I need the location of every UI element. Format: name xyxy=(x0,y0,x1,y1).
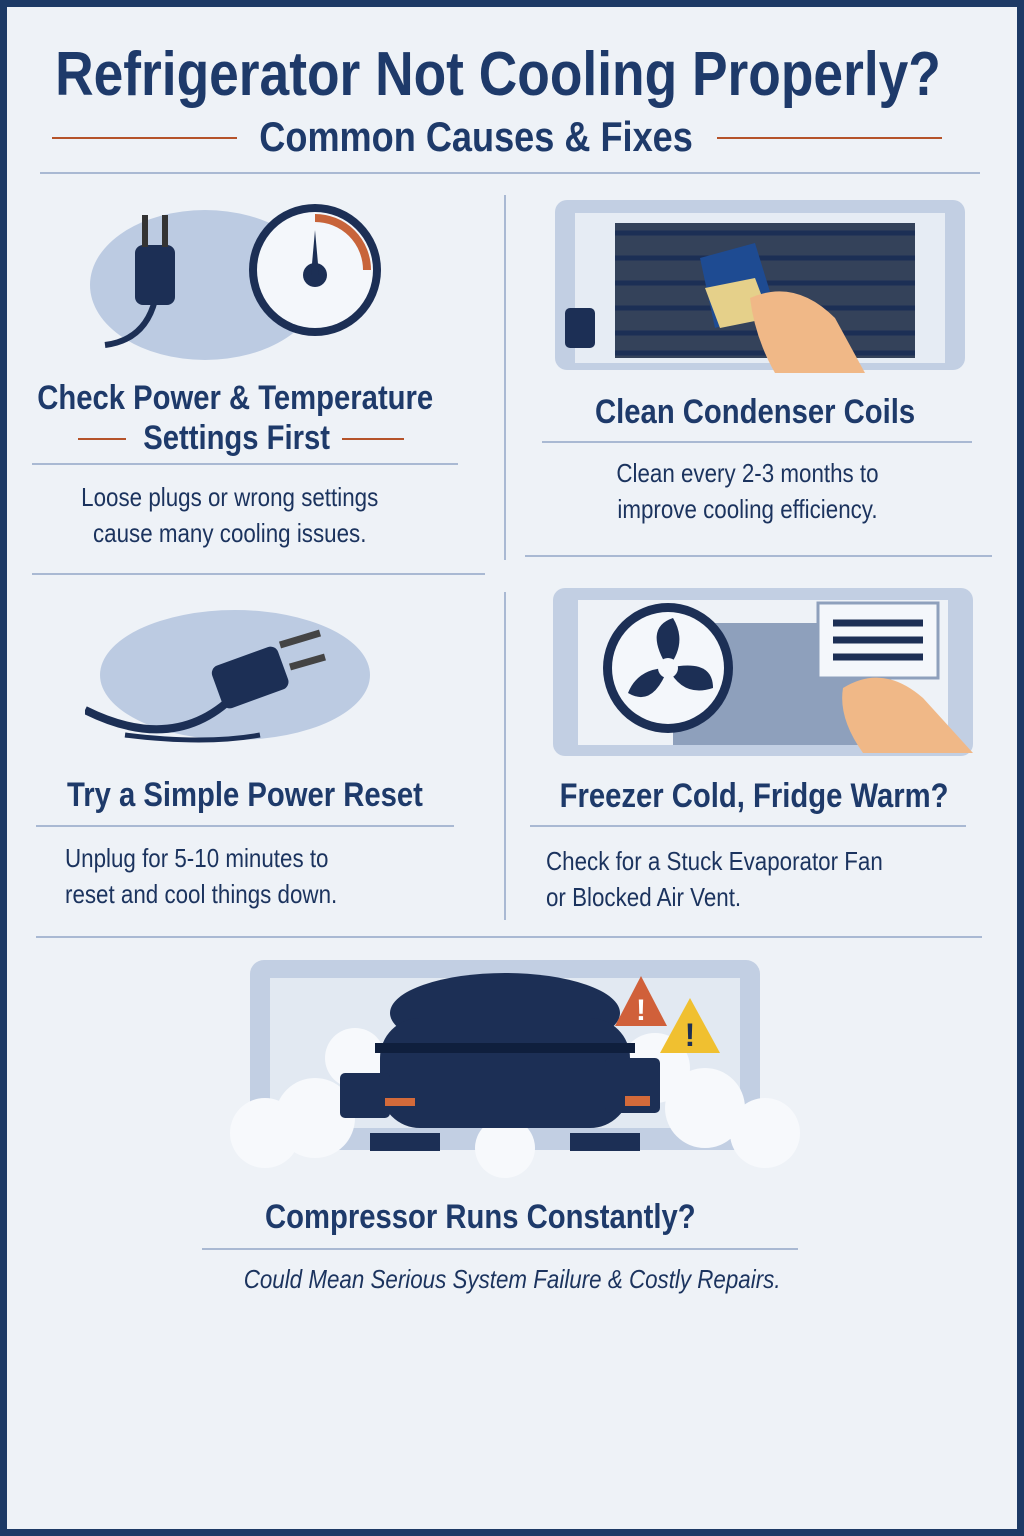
icon: compressor with warnings: ! xyxy=(685,1017,695,1053)
text: or Blocked Air Vent. xyxy=(546,882,741,912)
text: improve cooling efficiency. xyxy=(617,494,878,524)
text: Could Mean Serious System Failure & Costly Repairs. xyxy=(244,1264,781,1294)
text xyxy=(616,458,879,524)
text xyxy=(65,843,337,909)
panel: power & temperature xyxy=(32,204,458,548)
title: Refrigerator Not Cooling Properly? xyxy=(55,40,941,109)
subtitle: Common Causes & Fixes xyxy=(259,113,693,160)
icon: plug and thermostat xyxy=(90,204,381,360)
panel: power reset xyxy=(36,610,454,909)
text: Clean every 2-3 months to xyxy=(616,458,879,488)
heading: Settings First xyxy=(144,419,330,457)
text xyxy=(81,482,379,548)
panel: condenser coils xyxy=(542,200,972,524)
text: reset and cool things down. xyxy=(65,879,337,909)
icon: fan and vent xyxy=(553,588,973,756)
heading: Try a Simple Power Reset xyxy=(67,776,423,814)
heading: Check Power & Temperature xyxy=(37,379,433,417)
heading xyxy=(37,379,433,457)
heading: Compressor Runs Constantly? xyxy=(265,1198,695,1236)
text: Loose plugs or wrong settings xyxy=(81,482,379,512)
heading: Clean Condenser Coils xyxy=(595,393,915,431)
panel: compressor xyxy=(202,960,800,1294)
icon: coils with sponge xyxy=(555,200,965,373)
panel: freezer cold fridge warm xyxy=(530,588,973,912)
text: cause many cooling issues. xyxy=(93,518,367,548)
icon: compressor with warnings xyxy=(230,960,800,1178)
icon: compressor with warnings: ! xyxy=(636,994,646,1027)
text: Check for a Stuck Evaporator Fan xyxy=(546,846,883,876)
heading: Freezer Cold, Fridge Warm? xyxy=(560,777,949,815)
text: Unplug for 5-10 minutes to xyxy=(65,843,328,873)
text xyxy=(546,846,883,912)
icon: unplugged cord xyxy=(85,610,370,742)
